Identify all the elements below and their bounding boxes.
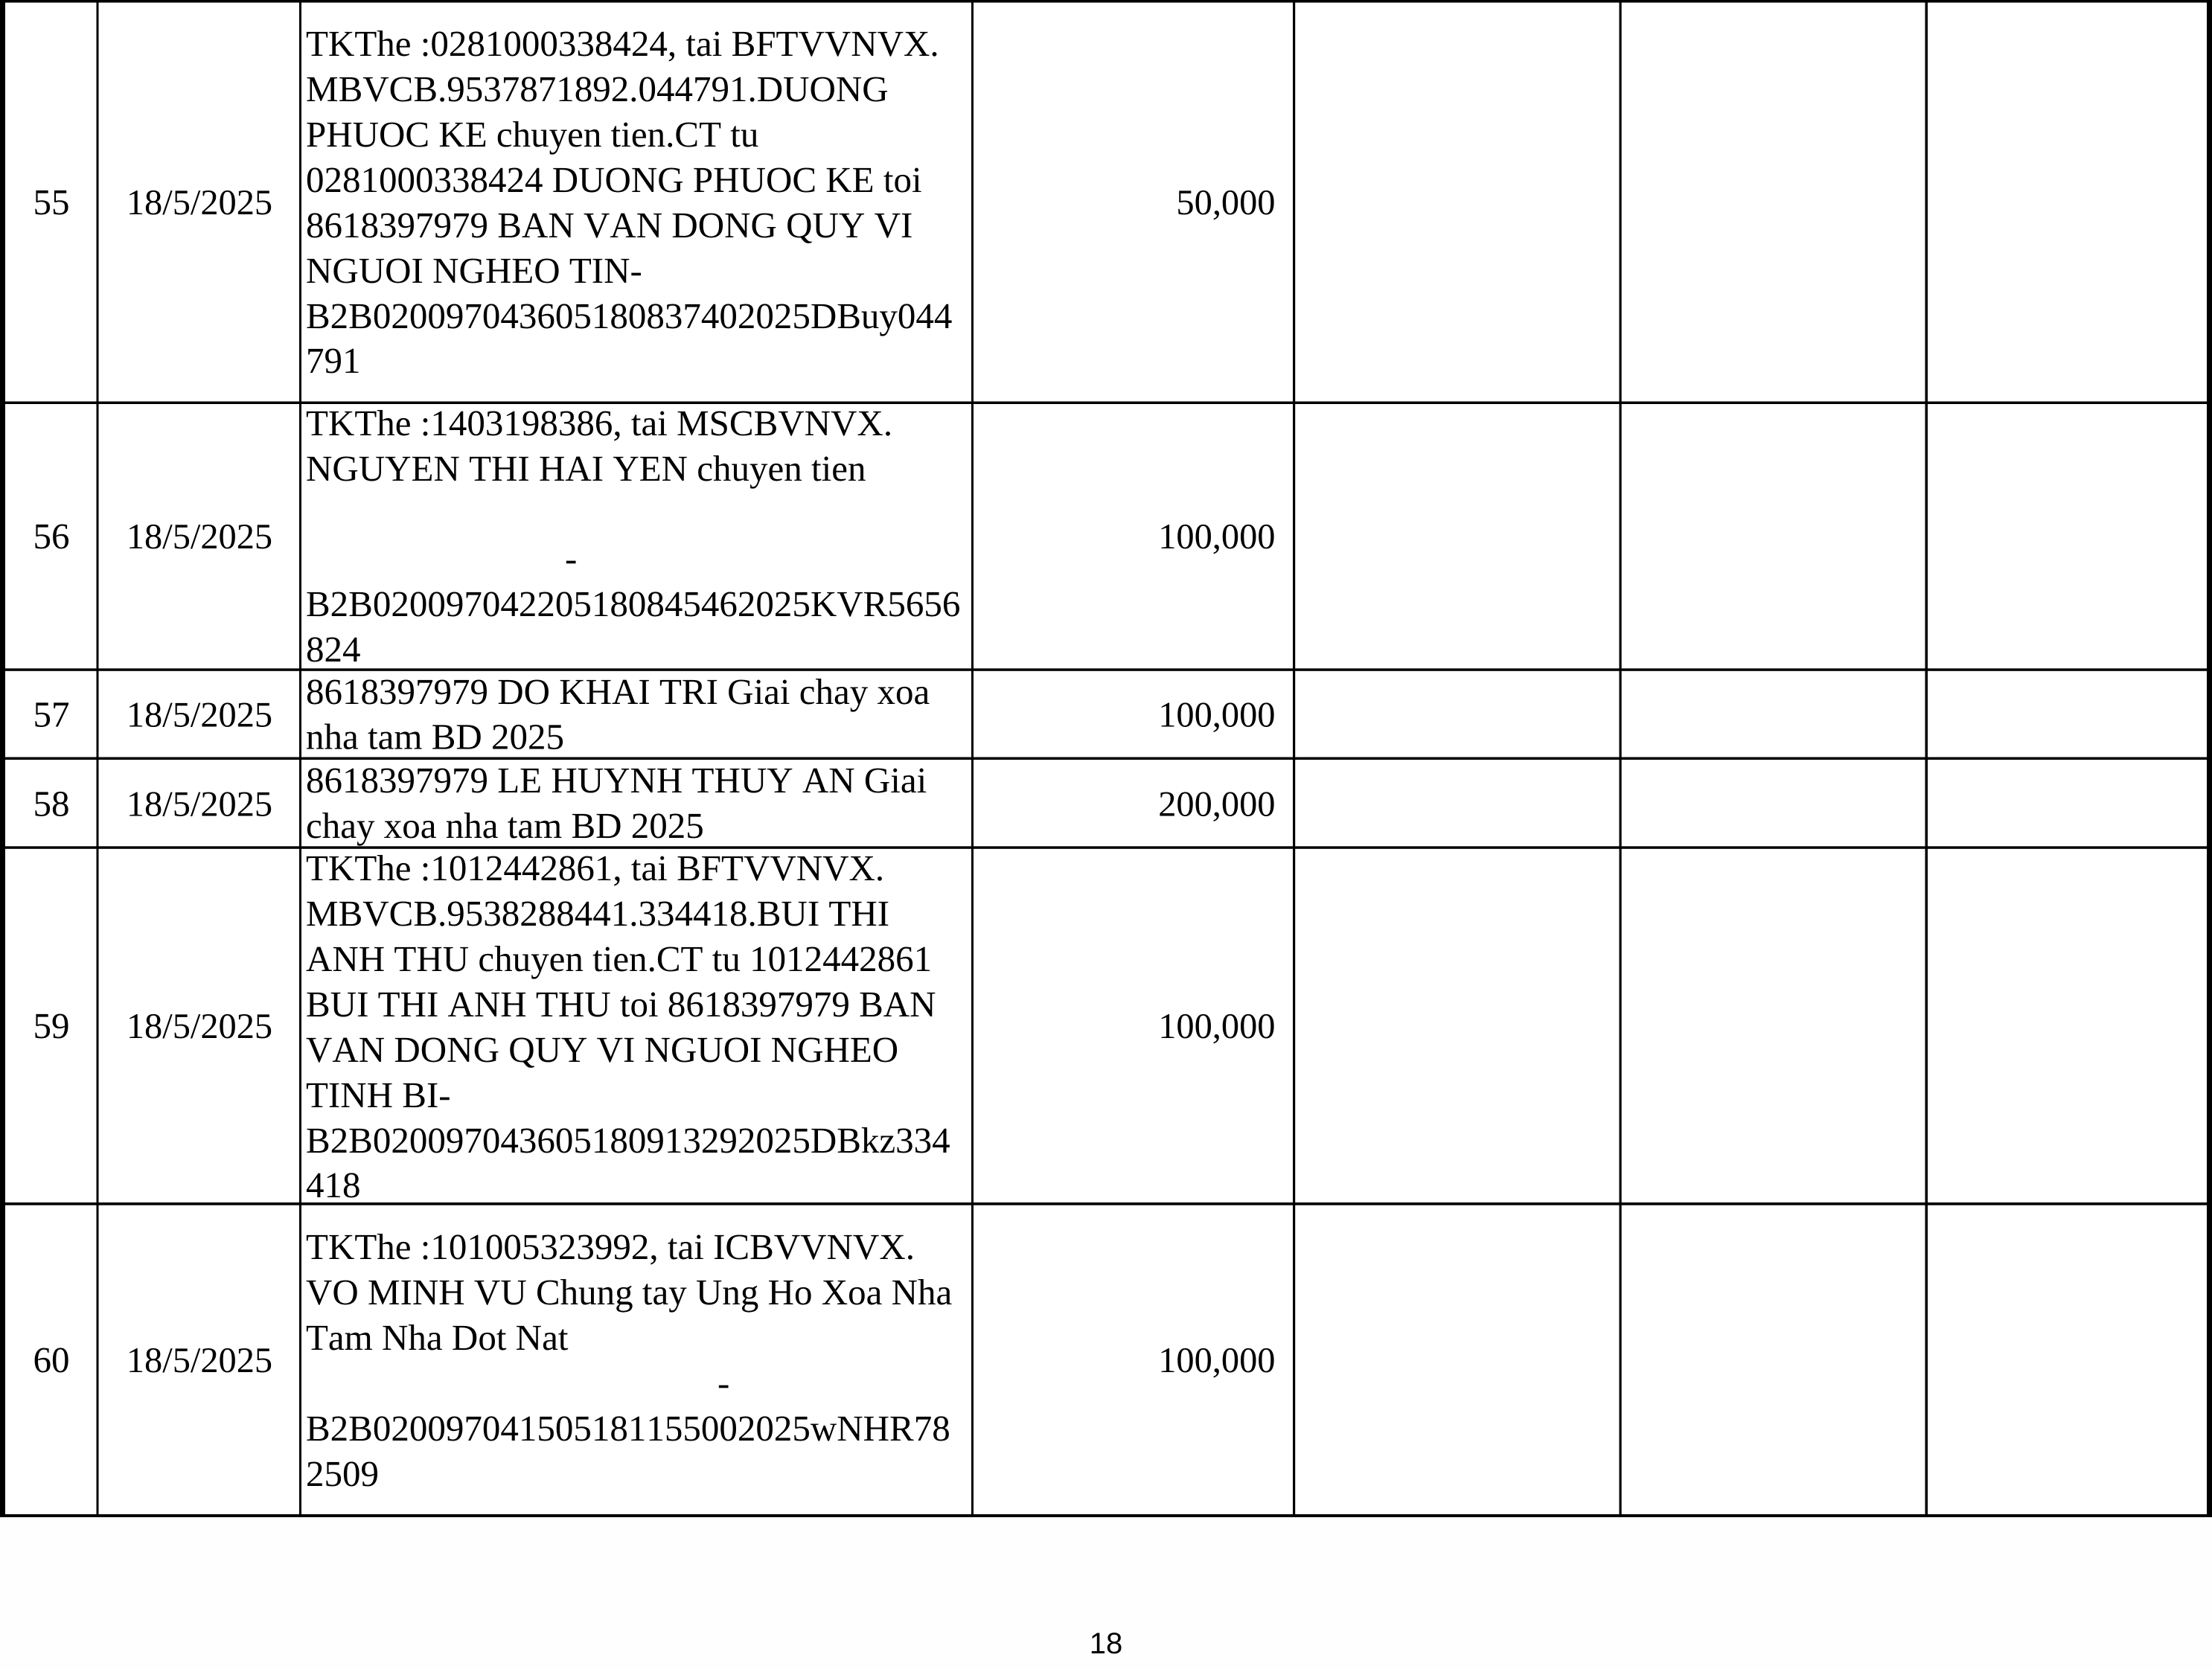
- description: BUI THI ANH THU toi 8618397979 BAN: [306, 984, 936, 1025]
- description: B2B020097043605180837402025DBuy044: [306, 295, 952, 336]
- description: TKThe :1012442861, tai BFTVVNVX.: [306, 848, 884, 888]
- amount: 100,000: [1158, 1007, 1276, 1046]
- description: 791: [306, 340, 360, 381]
- description: TINH BI-: [306, 1074, 451, 1115]
- description: 8618397979 LE HUYNH THUY AN Giai: [306, 760, 927, 801]
- row 55: [33, 23, 1276, 381]
- row 57: [33, 671, 1276, 757]
- row 59: [33, 848, 1276, 1205]
- date: 18/5/2025: [127, 1341, 272, 1380]
- row number: 59: [33, 1005, 70, 1046]
- description: MBVCB.9538288441.334418.BUI THI: [306, 893, 889, 934]
- date: 18/5/2025: [127, 784, 272, 824]
- date: 18/5/2025: [127, 1007, 272, 1046]
- description: -: [565, 538, 577, 579]
- description: 824: [306, 629, 360, 670]
- date: 18/5/2025: [127, 183, 272, 222]
- description: VO MINH VU Chung tay Ung Ho Xoa Nha: [306, 1272, 953, 1313]
- amount: 100,000: [1158, 1341, 1276, 1380]
- description: -: [717, 1362, 729, 1403]
- row number: 60: [33, 1339, 70, 1380]
- description: 418: [306, 1165, 360, 1205]
- description: VAN DONG QUY VI NGUOI NGHEO: [306, 1029, 898, 1070]
- description: 8618397979 BAN VAN DONG QUY VI: [306, 205, 912, 246]
- amount: 200,000: [1158, 784, 1276, 824]
- description: 8618397979 DO KHAI TRI Giai chay xoa: [306, 671, 930, 712]
- description: TKThe :0281000338424, tai BFTVVNVX.: [306, 23, 939, 64]
- row number: 55: [33, 182, 70, 222]
- row 60: [33, 1226, 1276, 1494]
- date: 18/5/2025: [127, 517, 272, 557]
- row 56: [33, 403, 1276, 670]
- description: TKThe :101005323992, tai ICBVVNVX.: [306, 1226, 915, 1267]
- description: MBVCB.9537871892.044791.DUONG: [306, 68, 889, 109]
- amount: 50,000: [1176, 183, 1276, 222]
- description: chay xoa nha tam BD 2025: [306, 805, 704, 846]
- row 58: [33, 760, 1276, 846]
- date: 18/5/2025: [127, 696, 272, 735]
- description: B2B020097041505181155002025wNHR78: [306, 1408, 950, 1449]
- description: B2B020097043605180913292025DBkz334: [306, 1120, 950, 1161]
- description: 2509: [306, 1453, 379, 1494]
- description: NGUOI NGHEO TIN-: [306, 250, 642, 291]
- row number: 57: [33, 694, 70, 735]
- page number: 18: [1090, 1627, 1122, 1660]
- description: B2B020097042205180845462025KVR5656: [306, 583, 960, 624]
- description: ANH THU chuyen tien.CT tu 1012442861: [306, 938, 932, 979]
- row number: 58: [33, 783, 70, 824]
- row number: 56: [33, 516, 70, 557]
- description: PHUOC KE chuyen tien.CT tu: [306, 114, 758, 155]
- description: 0281000338424 DUONG PHUOC KE toi: [306, 159, 922, 200]
- description: NGUYEN THI HAI YEN chuyen tien: [306, 448, 866, 489]
- description: nha tam BD 2025: [306, 717, 564, 757]
- description: Tam Nha Dot Nat: [306, 1317, 569, 1358]
- amount: 100,000: [1158, 696, 1276, 735]
- description: TKThe :1403198386, tai MSCBVNVX.: [306, 403, 892, 443]
- amount: 100,000: [1158, 517, 1276, 557]
